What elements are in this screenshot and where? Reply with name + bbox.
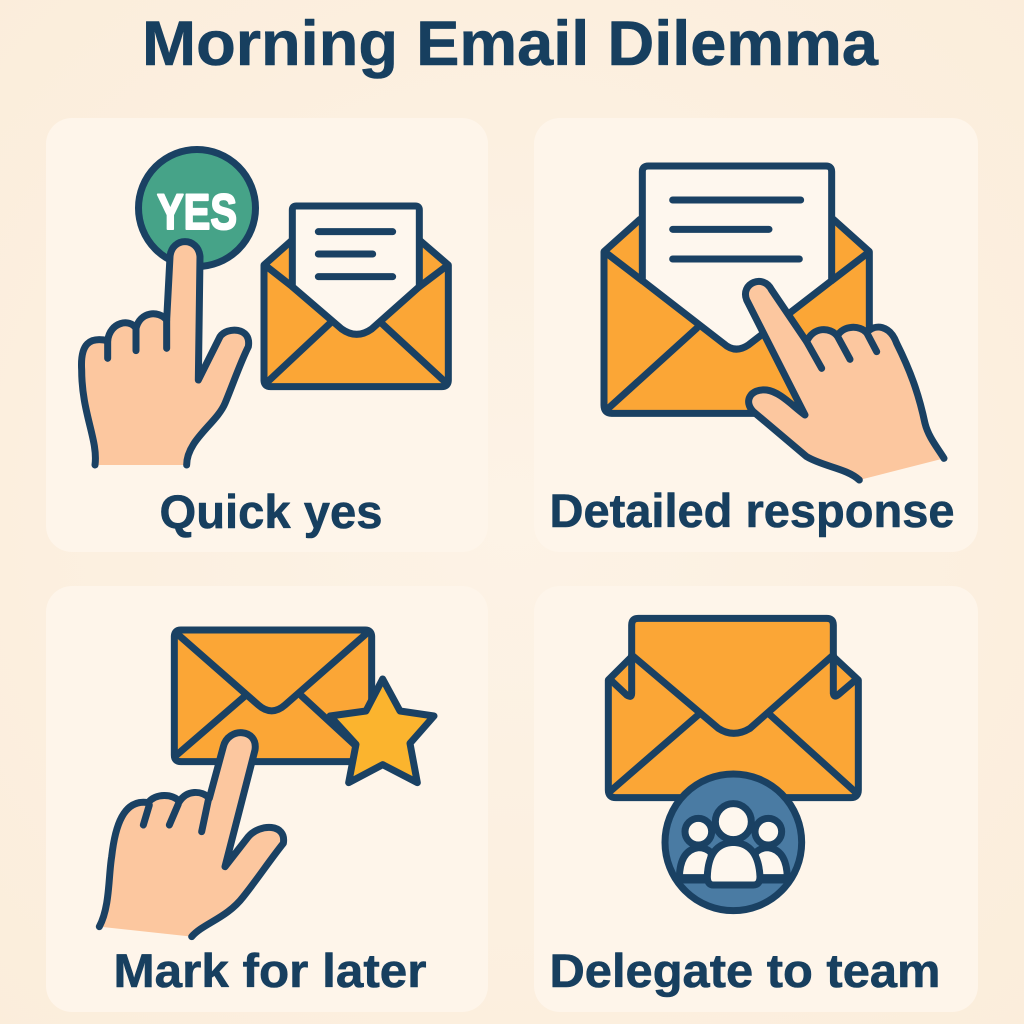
panel: quick yes bbox=[46, 118, 488, 552]
icon: hand pointing up bbox=[81, 242, 249, 465]
icon: yes button: YES bbox=[157, 184, 237, 240]
icon: team badge bbox=[665, 774, 802, 911]
label: Detailed response bbox=[550, 484, 954, 537]
panel: delegate to team bbox=[534, 586, 978, 1012]
title: Morning Email Dilemma bbox=[142, 9, 879, 79]
label: Mark for later bbox=[114, 944, 426, 997]
icon: star bbox=[330, 679, 434, 783]
panel: mark for later bbox=[46, 586, 488, 1012]
icon: large envelope with letter bbox=[604, 166, 869, 413]
icon: yes button bbox=[138, 150, 256, 266]
icon: envelope with letter bbox=[264, 206, 448, 387]
icon: hand pointing at envelope bbox=[99, 733, 284, 937]
label: Quick yes bbox=[160, 485, 382, 538]
icon: hand pointing at letter bbox=[745, 281, 944, 480]
icon: envelope bbox=[174, 630, 372, 762]
panel: detailed response bbox=[534, 118, 978, 552]
icon: envelope bbox=[608, 618, 858, 798]
label: Delegate to team bbox=[550, 944, 940, 997]
